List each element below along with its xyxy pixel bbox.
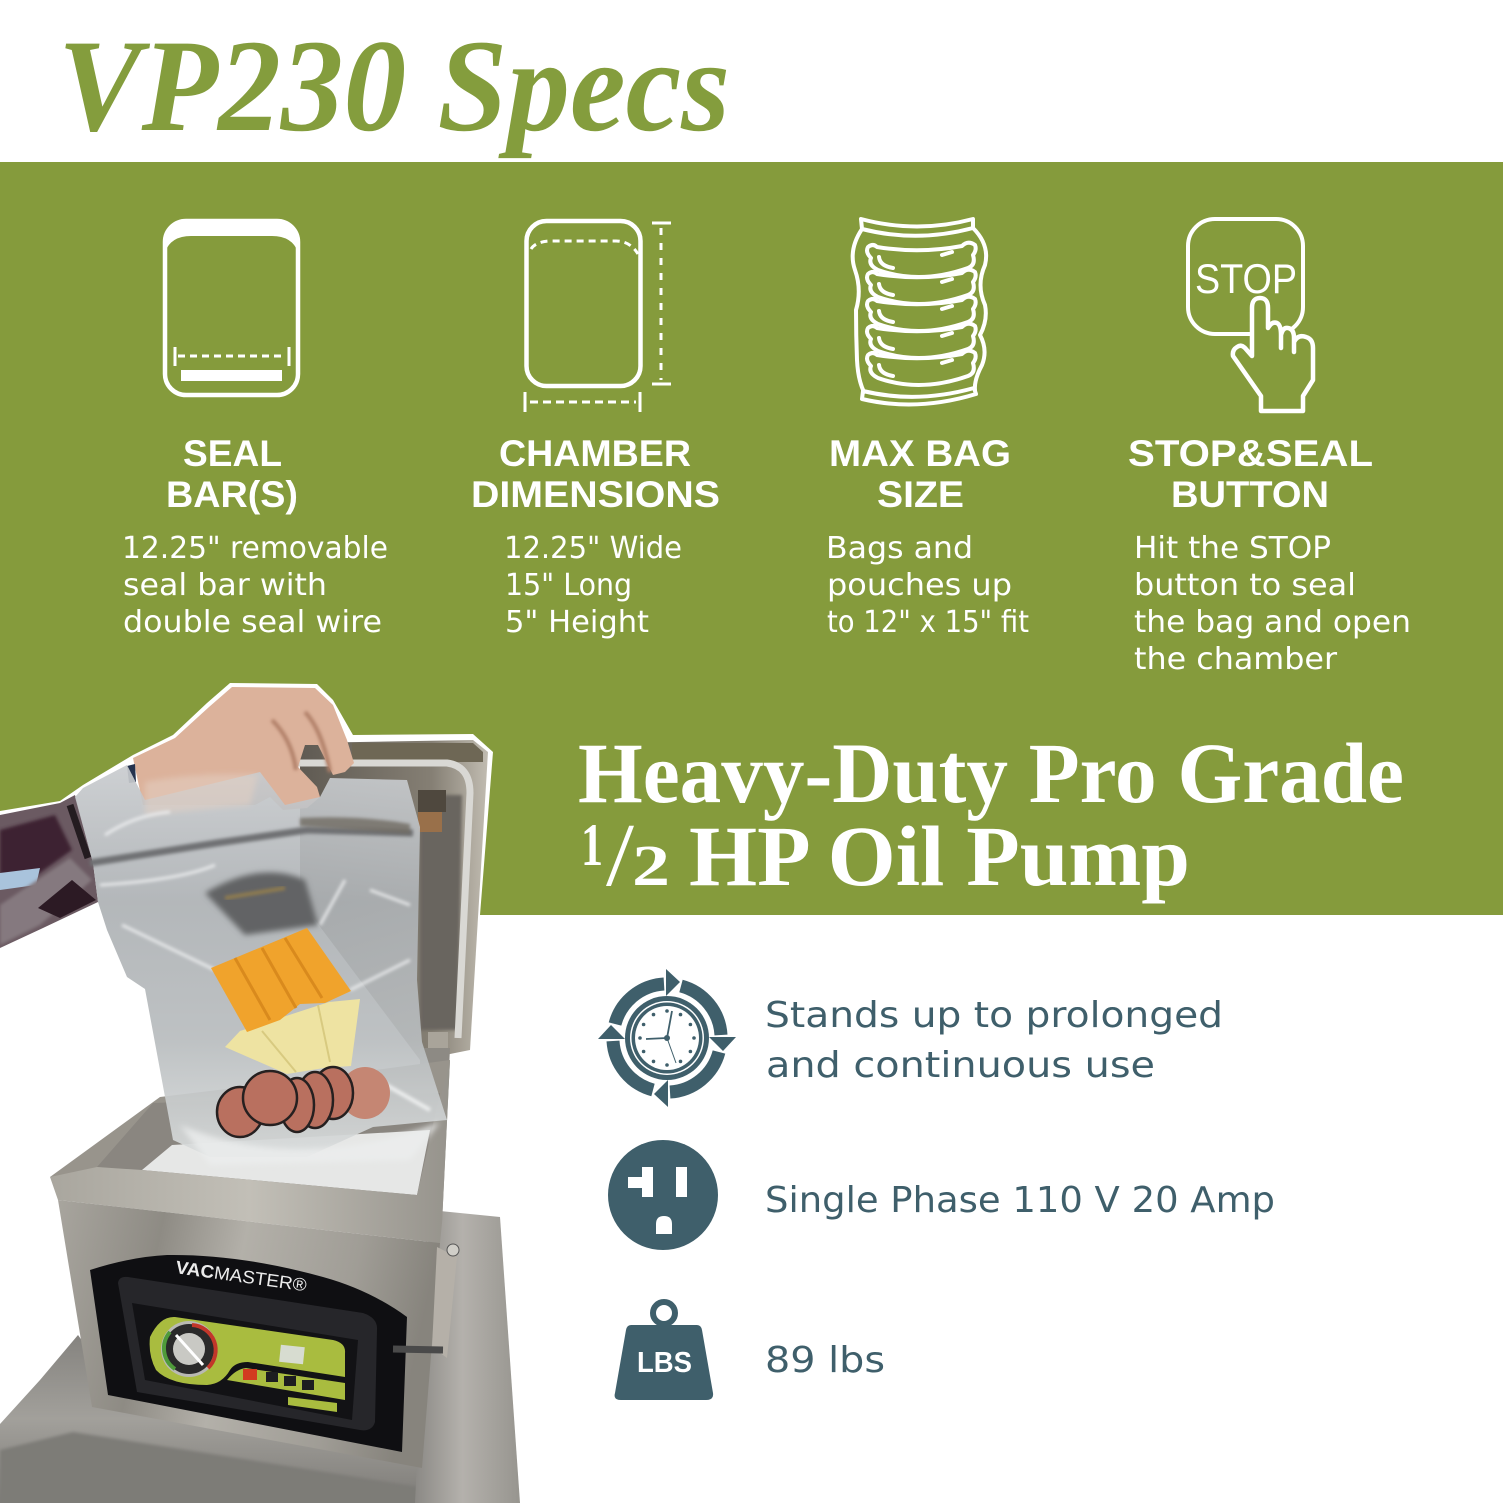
text: seal bar description: double seal wire [123,605,382,640]
gauge [161,1321,217,1377]
text: seal bar description: 12.25" removable [122,531,388,566]
heading: heavy-duty pro grade pump: 1 [581,812,603,878]
open lid [297,740,488,1215]
text: stop and seal description: the chamber [1134,642,1338,677]
yellow cheese [225,999,360,1074]
heading: heavy-duty pro grade pump: HP Oil Pump [689,808,1190,904]
text: max bag size description: Bags and [826,531,973,566]
heading: chamber dimensions [471,433,720,515]
icon: weight [615,1302,713,1400]
icon: seal bar [165,220,298,395]
icon: stop button with hand: STOP [1195,255,1297,302]
photo cut-out silhouette [0,683,493,915]
plaid sleeve [0,795,98,948]
text: prolonged use: Stands up to prolonged [765,995,1223,1036]
text: stop and seal description: Hit the STOP [1134,531,1331,566]
text: stop and seal description: button to seal [1134,568,1356,603]
heading: stop and seal button [1128,433,1373,515]
sausage slices [217,1067,390,1137]
text: stop and seal description: the bag and open [1134,605,1411,640]
heading: seal bar [166,433,298,515]
heading: stop and seal button: STOP&SEAL [1128,433,1373,474]
title: VP230 Specs [58,12,730,159]
panel: green spec band [0,162,1503,915]
heading: max bag size: MAX BAG [829,433,1011,474]
heading: stop and seal button: BUTTON [1171,474,1329,515]
vacuum bag [75,765,447,1165]
icon: power outlet [608,1140,718,1250]
heading: max bag size [829,433,1011,515]
text: max bag size description: pouches up [827,568,1012,603]
text: weight: 89 lbs [765,1340,885,1381]
text: stop and seal description [1134,531,1411,677]
text: max bag size description [826,531,1029,640]
brand name: VACMASTER® [174,1257,308,1295]
text: chamber dimensions description: 15" Long [505,568,632,603]
text: prolonged use [765,995,1223,1086]
icon: vacuum bag of sausages [853,219,986,404]
latch handle [393,1244,459,1358]
control buttons [243,1369,314,1390]
table sink recess [0,1432,420,1503]
arrows [598,969,736,1107]
icon: chamber dimensions [525,221,671,412]
heading: chamber dimensions: DIMENSIONS [471,474,720,515]
hand [127,687,354,810]
icon: stop button with hand [1188,219,1313,411]
heading: heavy-duty pro grade pump [578,725,1404,905]
text: max bag size description: to 12" x 15" fit [827,605,1029,640]
machine rim [50,1060,450,1243]
text: chamber dimensions description [504,531,682,640]
text: chamber dimensions description: 5" Height [505,605,649,640]
black control panel [90,1255,407,1452]
text: seal bar description: seal bar with [123,568,327,603]
chamber interior [50,1060,450,1223]
icon: weight: LBS [637,1347,692,1379]
machine front [58,1200,440,1468]
heading: seal bar: SEAL [183,433,282,474]
table surface, left and front [0,1335,440,1503]
photo: hand lifting vacuum bag above chamber sealer [0,683,520,1503]
green display [150,1317,345,1385]
heading: heavy-duty pro grade pump: 2 [632,833,670,898]
icon: continuous-use clock with arrows [598,969,736,1107]
heading: heavy-duty pro grade pump: / [606,806,634,905]
heading: chamber dimensions: CHAMBER [499,433,691,474]
text: power rating: Single Phase 110 V 20 Amp [765,1180,1275,1221]
text: chamber dimensions description: 12.25" Wide [504,531,682,566]
heading: heavy-duty pro grade pump: Heavy-Duty Pro Grade [578,725,1404,821]
table surface, right [415,1210,520,1503]
orange cheese [211,928,351,1032]
text: seal bar description [122,531,388,640]
heading: seal bar: BAR(S) [166,474,298,515]
heading: max bag size: SIZE [877,474,964,515]
text: prolonged use: and continuous use [766,1045,1155,1086]
